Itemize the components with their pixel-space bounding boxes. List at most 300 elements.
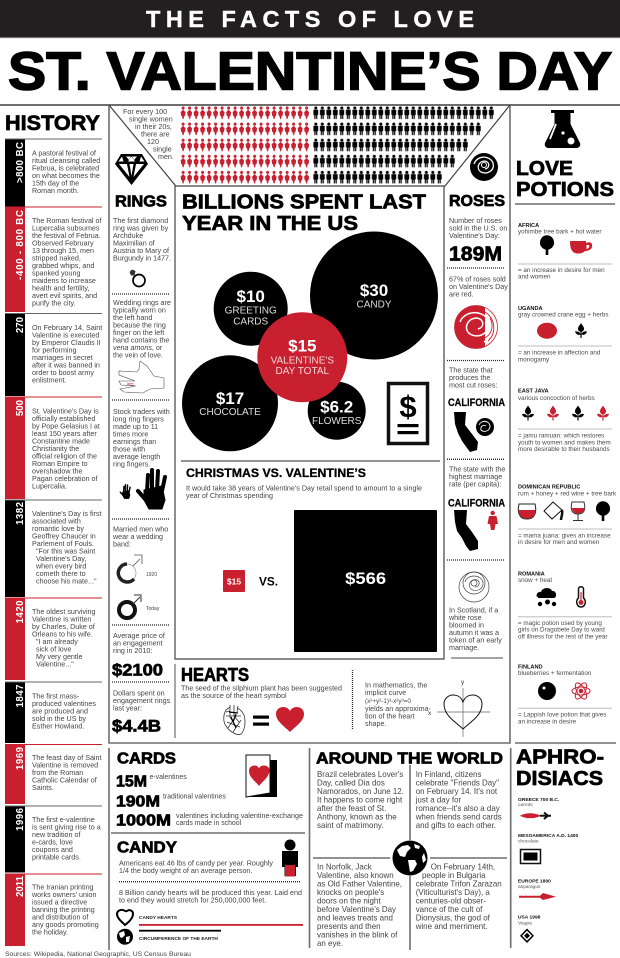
icon: tree [596,501,610,521]
item: carrots [518,797,560,819]
timeline entry 1996: printable cards. [32,854,81,862]
potion: dominican republic: in desire for men and women [518,539,600,546]
timeline entry 1847: Esther Howland. [32,722,84,730]
text: ratio statement: there are [141,130,170,138]
timeline entry 500: officially established [32,415,95,423]
text: brazil: saint of matrimony. [317,821,383,830]
text: wedding rings: because the ring [113,322,166,330]
timeline entry 400-800 BC: -400 - 800 BC [15,210,26,280]
icon: small and large hands [120,470,165,509]
timeline entry 1420 [5,598,102,680]
item: viagra: USA 1998 [518,914,541,920]
timeline entry 800 BC: Roman month. [32,187,79,195]
timeline entry 500: Christianity the [32,445,79,453]
text: norfolk: doors on the night [317,896,381,906]
timeline entry 1996: 1996 [15,807,26,831]
timeline entry 2011: 2011 [15,875,26,897]
timeline entry 500: Pagan celebration of [32,475,98,483]
timeline entry 1969: Saints. [32,784,54,792]
bubble: chocolate: CHOCOLATE [199,407,261,418]
heading: rings: RINGS [115,194,167,210]
label: vs: VS. [259,576,278,588]
text: ratio statement: men. [158,153,174,161]
icon: receipt with dollar sign: $ [399,389,417,424]
timeline entry 270: order to boost army [32,369,94,377]
timeline entry 1382: Valentine's Day is first [32,510,102,518]
icon: tree [540,235,554,255]
bubble: chocolate: $17 [216,389,244,408]
timeline entry 1847: sold in the US by [32,715,86,723]
text: 38 years: It would take 38 years of Valentine's Day retail spend to amount to a single [186,484,422,492]
heading: candy: CANDY [117,840,177,856]
stat: 190 million traditional valentines: 190M [116,794,160,810]
heading: billions spent: YEAR IN THE US [182,213,358,235]
icon: wine tumbler [518,504,536,519]
heading: roses: ROSES [449,193,505,210]
timeline entry 400-800 BC: purify the city. [32,300,76,308]
timeline entry 1969: 1969 [15,746,26,770]
timeline entry 400-800 BC: 13 through 15, men [32,247,94,255]
label: california marriage: CALIFORNIA [448,498,505,510]
text: scottish white rose: bloomed in [449,622,484,630]
text: brazil: Day, called Dia dos [317,778,385,788]
text: implicit curve: (x²+y²-1)³-x²y³=0 [365,698,411,705]
timeline entry 1847: are produced and [32,708,88,716]
text: norfolk: and leaves treats and [317,914,393,922]
text: average price: ring in 2010: [113,647,152,655]
text: first diamond ring: The first diamond [113,217,168,225]
timeline entry 270: for performing [32,346,76,354]
timeline entry 800 BC: A pastoral festival of [32,150,96,158]
timeline entry 270: enlistment. [32,377,67,385]
potion: romania: off illness for the rest of the year [518,633,608,640]
text: bulgaria: Dionysius, the god of [416,914,491,922]
icon: diamond [115,154,148,185]
text: stock traders: times more [113,430,148,438]
timeline entry 1996: e-cards, love [32,838,73,846]
timeline entry 1996: The first e-valentine [32,816,95,824]
text: stock traders: long ring fingers [113,416,164,424]
text: bulgaria: celebrate Trifon Zarazan [416,880,502,888]
text: ratio statement: single [153,146,172,154]
stat: 1000 million school valentines [116,812,303,830]
timeline entry 1847: produced valentines [32,700,96,708]
timeline entry 400-800 BC: stripped naked, [32,255,81,263]
text: finland: and gifts to each other. [416,821,496,830]
text: norfolk: knocks on people's [317,888,384,897]
top banner [0,0,620,38]
text: candy per year: Americans eat 46 lbs of candy per year. Roughly [119,860,273,868]
timeline entry 1382: cometh there to [36,570,86,578]
timeline entry 2011: banning the printing [32,906,95,914]
text: dollars spent: last year: [113,704,142,712]
item: chocolate: MESOAMERICA A.D. 1400 [518,833,579,839]
timeline entry 1382: "For this was Saint [36,548,95,556]
icon: snow cloud [537,588,556,606]
bar: christmas 566 dollars: $566 [345,569,386,588]
potion: finland: = Lappish love potion that gives [518,712,606,719]
potion: africa: and women [518,274,551,281]
text: first diamond ring: Austria to Mary of [113,247,169,255]
potion: romania [518,572,612,640]
timeline entry 2011: and distribution of [32,914,88,922]
text: state producing roses: most cut roses: [449,382,497,390]
timeline entry 1969: The feast day of Saint [32,754,101,762]
timeline entry 1382: Valentine's Day, [36,555,86,563]
timeline entry 1382 [5,500,102,597]
text: first diamond ring: Archduke [113,232,143,240]
icon: thermometer [577,587,585,607]
stat: 1000 million school valentines: valentines including valentine-exchange [176,813,303,820]
timeline entry 1382: when every bird [35,562,86,570]
text: silphium seed: The seed of the silphium plant has been suggested [181,684,342,692]
text: brazil: Namorados, on June 12. [317,787,404,796]
heading: aphrodisiacs: DISIACS [516,768,603,790]
timeline entry 1969: Catholic Calendar of [32,776,97,784]
text: scottish white rose: In Scotland, if a [449,606,498,614]
heading: around the world: AROUND THE WORLD [316,750,503,768]
potion: east java: EAST JAVA [518,389,549,395]
text: first diamond ring: ring was given by [113,224,169,232]
label: candy hearts: CANDY HEARTS [139,915,178,921]
potion: africa: AFRICA [518,223,539,229]
text: share of red roses: 67% of roses sold [449,276,506,284]
icon: small globe [117,929,133,945]
potion: romania: = magic potion used by young [518,620,602,627]
panel: aphrodisiacs [516,746,604,943]
icon: red woman [488,511,498,530]
text: number of roses: sold in the U.S. on [449,224,507,232]
bubble: flowers: $6.2 [320,398,353,416]
text: norfolk: presents and then [317,922,381,931]
text: bulgaria: wine and merriment. [415,922,488,931]
timeline entry 1382: associated with [32,518,81,526]
icon: california map [454,412,478,452]
text: wedding rings: hand contains the [113,336,169,344]
icon: equals sign [253,716,269,726]
icon: male symbol 1920: 1920 [146,572,157,578]
potion: finland: blueberries + fermentation [518,670,592,677]
potion: dominican republic: rum + honey + red wine + tree bark [518,490,617,497]
text: first diamond ring: Maximilian of [113,240,155,248]
timeline entry 500: by Pope Gelasius I at [32,422,100,430]
text: state producing roses: produces the [449,374,490,382]
icon: atom [572,681,590,701]
icon: candy heart [117,910,133,925]
timeline entry 1420: Valentine is written [32,616,91,624]
text: implicit curve: shape. [365,720,386,728]
heading: christmas vs valentine's: CHRISTMAS VS. VALENTINE’S [186,466,366,480]
bar: valentine's 15 dollars: $15 [227,576,241,586]
text: ratio statement: single women [129,116,173,124]
text: brazil: Brazil celebrates Lover's [317,770,403,779]
text: finland: on February 14. It's not [416,787,498,796]
icon: wine glass [571,502,585,520]
icon: diamond ring [130,270,145,286]
potion: east java: youth to women and makes them [518,439,611,446]
timeline entry 400-800 BC: Lupercalia subsumes [32,224,100,232]
icon: 67 percent red rose [454,306,498,349]
text: stock traders: made up to 11 [113,423,158,431]
potion: uganda: monogamy [518,356,550,363]
timeline entry 1969: Valentine is removed [32,762,98,770]
timeline entry 270: after it was banned in [32,362,100,370]
text: finland: just a day for [415,796,461,804]
text: candy hearts: to end they would stretch for 250,000,000 feet. [119,896,266,904]
text: scottish white rose: white rose [448,614,482,622]
potion: east java: = jamu ramuan: which restores [518,433,604,440]
text: norfolk: In Norfolk, Jack [317,862,372,872]
text: norfolk: as Old Father Valentine, [317,880,402,888]
text: marriage rate state: highest marriage [449,473,502,481]
chart: heart curve on axes: x [428,710,432,717]
text: married men: band: [113,540,131,548]
bubble: candy: CANDY [356,300,392,310]
text: silphium seed: as the source of the heart symbol [181,692,287,700]
timeline entry 2011 [5,874,102,946]
text: candy hearts: 8 Billion candy hearts will be produced this year. Laid end [119,889,302,897]
timeline entry 1382: Parlement of Fouls. [32,540,94,548]
heading: aphrodisiacs: APHRO- [516,746,604,768]
timeline entry 500: 500 [15,400,26,416]
stat: 15 million e-valentines [116,774,187,790]
timeline entry 400-800 BC: health and fertility, [32,285,89,293]
bubble: flowers: FLOWERS [312,416,362,427]
timeline entry 500: least 150 years after [32,430,97,438]
potion: africa: yohimbe tree bark + hot water [518,228,601,236]
icon: person one quarter red [282,840,298,876]
label: circumference of the earth: CIRCUMFERENCE OF THE EARTH [139,936,218,942]
timeline entry 500: official religion of the [32,452,97,460]
potion: east java: more desirable to their husbands [518,446,610,453]
bar: valentine's 15 dollars [223,570,245,592]
timeline entry 1847: 1847 [15,684,26,708]
timeline entry 500 [5,397,102,499]
potion: africa [518,223,612,281]
potion: east java [518,389,612,453]
icon: male symbol today: Today [146,606,160,612]
heading: love potions: LOVE [516,158,573,180]
timeline entry 1847: The first mass- [32,692,80,700]
stat: 15 million e-valentines: 15M [116,774,147,790]
icon: white rose outline [459,572,489,602]
icon: receipt with dollar sign [388,384,428,444]
icon: four herbs [522,406,609,420]
text: norfolk: before Valentine's Day [317,905,396,914]
timeline entry 270: 270 [15,317,26,333]
icon: california map [454,510,478,551]
bubble: candy [310,232,438,360]
timeline entry 2011: The Iranian printing [32,884,94,892]
icon: herbs [575,323,587,338]
icon: red heart [276,707,304,732]
timeline entry 1420: My very gentle [36,653,82,661]
item: viagra: Viagra [518,920,532,926]
text: implicit curve: yields an approxima- [365,705,432,713]
text: bulgaria: On February 14th, [431,862,495,872]
item: asparagus [518,878,556,900]
chart: heart curve on axes: y [461,679,465,686]
potion: uganda: gray crowned crane egg + herbs [518,312,608,319]
bubble: flowers [308,382,366,440]
stat: 15 million e-valentines: e-valentines [150,774,187,781]
chart: heart curve on axes [428,679,490,737]
timeline entry 1847 [5,682,102,743]
text: marriage rate state: The state with the [449,466,505,474]
heading: love potions: POTIONS [516,179,614,201]
text: stock traders: average length [113,453,160,461]
timeline entry 270: On February 14, Saint [32,324,102,332]
stat: 1000 million school valentines: 1000M [116,812,171,830]
text: norfolk: an eye. [317,939,343,948]
potion: dominican republic: = mama juana: gives an increase [518,532,611,539]
text: finland: when friends send cards [415,812,502,822]
text: average price: an engagement [113,640,163,648]
timeline entry 1420: sick of love [36,646,71,654]
icon: globe [392,840,428,876]
timeline entry 1382: Geoffrey Chaucer in [32,532,96,540]
icon: small black rose [476,418,494,436]
text: bulgaria: (Viticulturist's Day), a [416,888,490,897]
text: wedding rings: finger on the left [113,329,164,337]
text: bulgaria: vance of the cult of [416,905,483,914]
text: ratio statement: 120 [147,138,159,146]
text: stock traders: ring fingers. [113,460,150,468]
text: finland: celebrate "Friends Day" [416,778,499,788]
top banner: THE FACTS OF LOVE [146,6,474,32]
timeline entry 400-800 BC: maidens to increase [32,277,96,285]
icon: egg [537,323,557,339]
text: finland: In Finland, citizens [416,770,481,779]
text: average price: Average price of [113,632,165,640]
panel: history timeline [5,112,102,946]
panel: cards [116,750,303,830]
text: share of red roses: are red. [449,290,474,298]
heading: history: HISTORY [5,112,100,135]
potion: dominican republic: DOMINICAN REPUBLIC [518,485,580,491]
timeline entry 800 BC: ritual cleansing called [32,157,100,165]
chart: 100 women pictogram [180,105,310,186]
timeline entry 400-800 BC: Observed February [32,240,94,248]
text: bulgaria: people in Bulgaria [422,871,486,880]
timeline entry 1382: choose his mate..." [36,578,97,586]
bubble: valentine's day total: VALENTINE'S [271,356,334,366]
timeline entry 1420: 1420 [15,600,26,624]
text: stock traders: Stock traders with [113,408,170,416]
timeline entry 400-800 BC [5,207,102,312]
panel: around the world [313,750,507,950]
sources: Sources: Wikipedia, National Geographic, US Census Bureau [5,951,191,958]
stat: 1000 million school valentines: cards made in school [176,820,242,827]
timeline entry 1996: is sent giving rise to a [32,824,101,832]
text: norfolk: vanishes in the blink of [317,930,398,940]
text: share of red roses: on Valentine's Day [449,283,508,291]
panel: candy [117,840,303,945]
item: carrots: GREECE 700 B.C. [518,797,560,803]
item: viagra [518,914,541,943]
potion: romania: girls on Dragobete Day to ward [518,627,605,634]
timeline entry 1996 [5,806,102,872]
icon: flask [545,110,580,148]
stat: 190 million traditional valentines: traditional valentines [163,794,226,801]
timeline entry 400-800 BC: the festival of Februa. [32,232,101,240]
panel: hearts [181,665,490,737]
bar: candy hearts length [139,924,303,926]
panel: love potions [515,110,617,725]
text: stock traders: earnings than [113,438,156,446]
potion: dominican republic [518,485,617,546]
potion: uganda: = an increase in affection and [518,349,601,356]
text: 38 years: year of Christmas spending [186,492,273,500]
text: scottish white rose: marriage. [449,644,479,652]
bubble: candy: $30 [360,281,388,300]
timeline entry 400-800 BC: spanked young [32,270,80,278]
item: chocolate [518,833,579,864]
timeline entry 1382: 1382 [15,502,26,525]
potion: uganda: UGANDA [518,306,543,312]
icon: male symbol 1920 [118,555,157,582]
text: implicit curve: implicit curve [365,689,406,697]
icon: red cup [570,241,592,254]
icon: black rose [470,153,498,181]
potion: romania: ROMANIA [518,572,545,578]
text: state producing roses: The state that [449,366,493,374]
icon: blueberry [538,682,556,700]
timeline entry 1969: from the Roman [32,769,83,777]
text: scottish white rose: autumn it was a [449,629,499,637]
text: stock traders: those with [113,446,145,454]
label: california: CALIFORNIA [448,397,505,409]
bubble: greeting cards: $10 [237,287,265,306]
text: marriage rate state: rate (per capita): [449,480,501,488]
timeline entry 1420: Valentine..." [36,660,74,668]
panel: billions spent [182,192,438,451]
panel: roses [447,153,508,652]
bar: earth circumference [139,930,221,932]
text: implicit curve: tion of the heart [365,712,415,720]
timeline entry 270: Valentine is executed [32,332,99,340]
timeline entry 800 BC: on what becomes the [32,172,100,180]
item: asparagus: asparagus [518,884,541,890]
icon: hand outline with ring [119,361,164,393]
text: dollars spent: engagement rings [113,697,171,705]
timeline entry 2011: works owners' union [31,891,96,899]
item: asparagus: EUROPE 1800 [518,878,551,884]
text: married men: Married men who [113,526,168,534]
text: brazil: after the feast of St. [317,804,386,813]
timeline entry 270 [5,314,102,396]
bubble: valentine's day total [257,312,347,402]
potion: finland: FINLAND [518,664,543,670]
timeline entry 1420: by Charles, Duke of [32,623,95,631]
text: scottish white rose: token of an early [449,636,502,644]
timeline entry 1420: The oldest surviving [32,608,96,616]
text: number of roses: Number of roses [449,217,502,225]
bubble: greeting cards: CARDS [233,316,269,328]
timeline entry 1420: Orleans to his wife. [32,630,93,638]
panel: rings [112,154,171,736]
text: candy per year: 1/4 the body weight of an average person. [119,867,252,875]
text: ratio statement: For every 100 [123,108,167,116]
timeline entry 500: St. Valentine's Day is [32,408,99,416]
item: chocolate: chocolate [518,838,539,844]
text: wedding rings: typically worn on [113,306,166,314]
stat: 4.4 billion dollars: $4.4B [112,716,161,736]
potion: finland: an increase in desire [518,718,577,725]
text: dollars spent: Dollars spent on [113,690,165,698]
timeline entry 2011: issued a directive [32,898,87,906]
stat: 2100 dollars: $2100 [112,660,163,680]
